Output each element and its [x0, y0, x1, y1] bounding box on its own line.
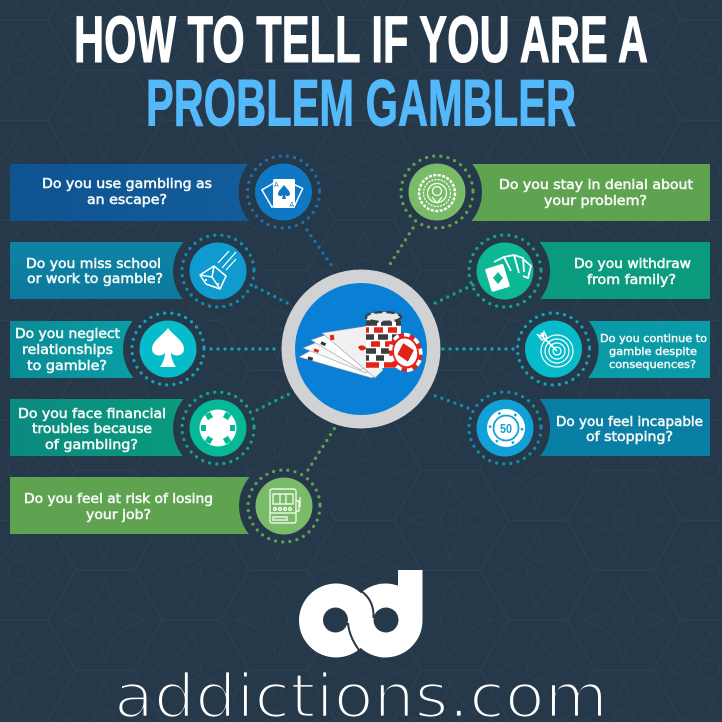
item: miss school or work	[10, 226, 291, 316]
question text: of stopping?	[586, 430, 673, 445]
question text: Do you feel incapable	[556, 415, 703, 430]
icon: target with arrow	[538, 332, 573, 367]
logo mark	[299, 570, 422, 658]
question text	[18, 407, 166, 453]
connector	[308, 426, 336, 470]
banner	[10, 164, 250, 221]
connector	[387, 228, 413, 269]
icon: 50 chip	[487, 409, 525, 447]
question text: your problem?	[544, 194, 647, 209]
question text: Do you withdraw	[574, 257, 691, 272]
chip stack	[366, 312, 401, 368]
central illustration: cards and chips	[282, 270, 440, 428]
question text: Do you continue to	[600, 332, 707, 345]
question text: Do you stay in denial about	[499, 178, 693, 193]
item: use gambling as an escape	[10, 147, 334, 269]
icon: mandala	[419, 175, 455, 211]
banner	[10, 242, 185, 299]
icon: playing cards	[262, 179, 303, 209]
banner	[470, 164, 710, 221]
question text	[15, 327, 120, 374]
banner	[10, 399, 185, 456]
connector	[204, 347, 281, 351]
question text: Do you neglect	[15, 327, 120, 342]
connector	[257, 393, 291, 410]
connector	[433, 395, 468, 408]
item: financial troubles	[10, 383, 291, 473]
question text: of gambling?	[45, 438, 138, 453]
question text	[600, 332, 707, 371]
icon: poker chip	[200, 410, 236, 446]
question text: to gamble?	[27, 359, 107, 374]
question text	[499, 178, 693, 209]
banner	[538, 399, 710, 456]
question text: troubles because	[32, 422, 152, 437]
banner	[10, 321, 134, 378]
icon: fan of cards	[485, 255, 531, 292]
connector	[307, 230, 334, 269]
question text	[26, 257, 163, 287]
item: withdraw from family	[433, 226, 710, 316]
item: incapable of stopping	[433, 383, 710, 473]
question text	[574, 257, 691, 288]
playing cards fan	[299, 326, 383, 378]
question text: Do you use gambling as	[42, 177, 212, 192]
question text: an escape?	[87, 193, 167, 208]
banner	[10, 477, 251, 534]
icon: slot machine	[270, 489, 300, 523]
item: neglect relationships	[10, 304, 281, 394]
question text: Do you feel at risk of losing	[24, 492, 213, 507]
question text	[24, 492, 213, 523]
banner	[586, 321, 710, 378]
icon: spade	[152, 328, 184, 367]
item: denial	[387, 147, 710, 269]
icon: dice	[200, 251, 236, 289]
question text: gamble despite	[609, 345, 697, 358]
question text: your job?	[86, 508, 151, 523]
icon: playing cards: A	[289, 202, 294, 209]
question text: Do you miss school	[26, 257, 161, 272]
banner	[538, 242, 710, 299]
icon: playing cards: A	[274, 182, 279, 189]
icon: 50 chip: 50	[500, 421, 512, 436]
question text	[42, 177, 212, 208]
question text: consequences?	[609, 358, 696, 371]
item: continue despite consequences	[443, 304, 710, 394]
question text: relationships	[22, 343, 113, 358]
connector	[433, 285, 473, 304]
item: risk of losing job	[10, 426, 336, 551]
large red chip	[385, 329, 426, 375]
connector	[443, 347, 518, 351]
question text: or work to gamble?	[27, 272, 163, 287]
question text: Do you face financial	[18, 407, 166, 422]
question text: from family?	[587, 273, 676, 288]
question text	[556, 415, 703, 445]
title	[74, 2, 648, 140]
connector	[256, 287, 291, 305]
